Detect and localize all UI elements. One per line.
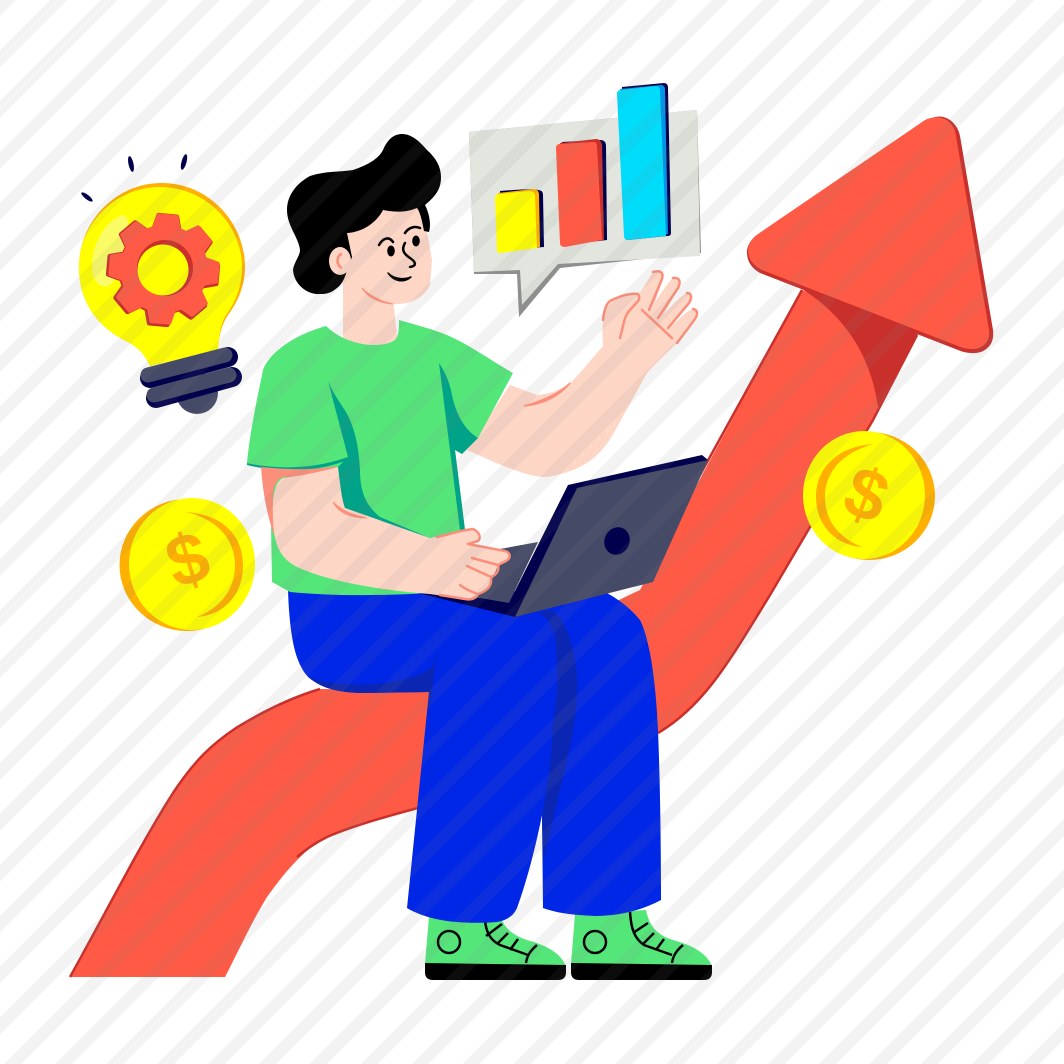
gear: [108, 215, 218, 325]
left arm and hand: [273, 467, 510, 599]
fold right: [439, 363, 478, 530]
bulb rim: [79, 183, 245, 366]
arrow head edge: [747, 116, 993, 353]
camera dot: [600, 523, 634, 559]
pants: [288, 590, 661, 923]
leg crease: [538, 610, 577, 863]
keyboard base: [418, 542, 538, 603]
arrow head face: [748, 117, 989, 349]
t-shirt: [247, 320, 513, 595]
speech bubble with bar chart: [469, 83, 701, 317]
shoe left: [425, 916, 566, 980]
bulb base cap: [176, 372, 218, 414]
light rays: [80, 154, 188, 203]
nose: [403, 243, 415, 267]
bulb highlight: [92, 215, 128, 286]
arrow head shadow: [802, 289, 918, 407]
dollar sign: $: [157, 516, 219, 604]
face: [345, 205, 432, 304]
growth arrow: [70, 116, 993, 977]
elbow crease: [333, 502, 367, 518]
jaw line: [362, 288, 393, 304]
sleeve hem: [247, 457, 348, 470]
fold left: [328, 381, 430, 538]
bar yellow: [495, 189, 544, 253]
coin right: [803, 431, 935, 560]
coin left: [120, 498, 255, 631]
lid edge: [509, 455, 708, 617]
arm crease: [524, 383, 570, 406]
eyes and brows: [379, 227, 420, 281]
hand outline: [437, 529, 510, 599]
smile: [388, 273, 411, 281]
laptop: [418, 455, 708, 617]
person: [247, 134, 712, 980]
right arm raised: [467, 271, 697, 477]
bubble face: [469, 110, 700, 305]
hair: [287, 134, 441, 294]
light bulb with gear: [79, 154, 245, 414]
dollar sign: $: [834, 451, 899, 539]
bulb screw thread: [148, 355, 232, 398]
lid face: [515, 460, 708, 617]
ear: [329, 247, 351, 275]
neck: [343, 270, 399, 352]
thigh shadow: [308, 650, 437, 720]
bubble shadow: [469, 110, 701, 317]
under-sleeve shade: [261, 466, 337, 540]
shoe right: [571, 910, 712, 980]
hand lines: [603, 271, 697, 343]
bar red: [556, 139, 607, 247]
bar cyan: [617, 83, 671, 240]
bulb glass: [79, 187, 242, 366]
